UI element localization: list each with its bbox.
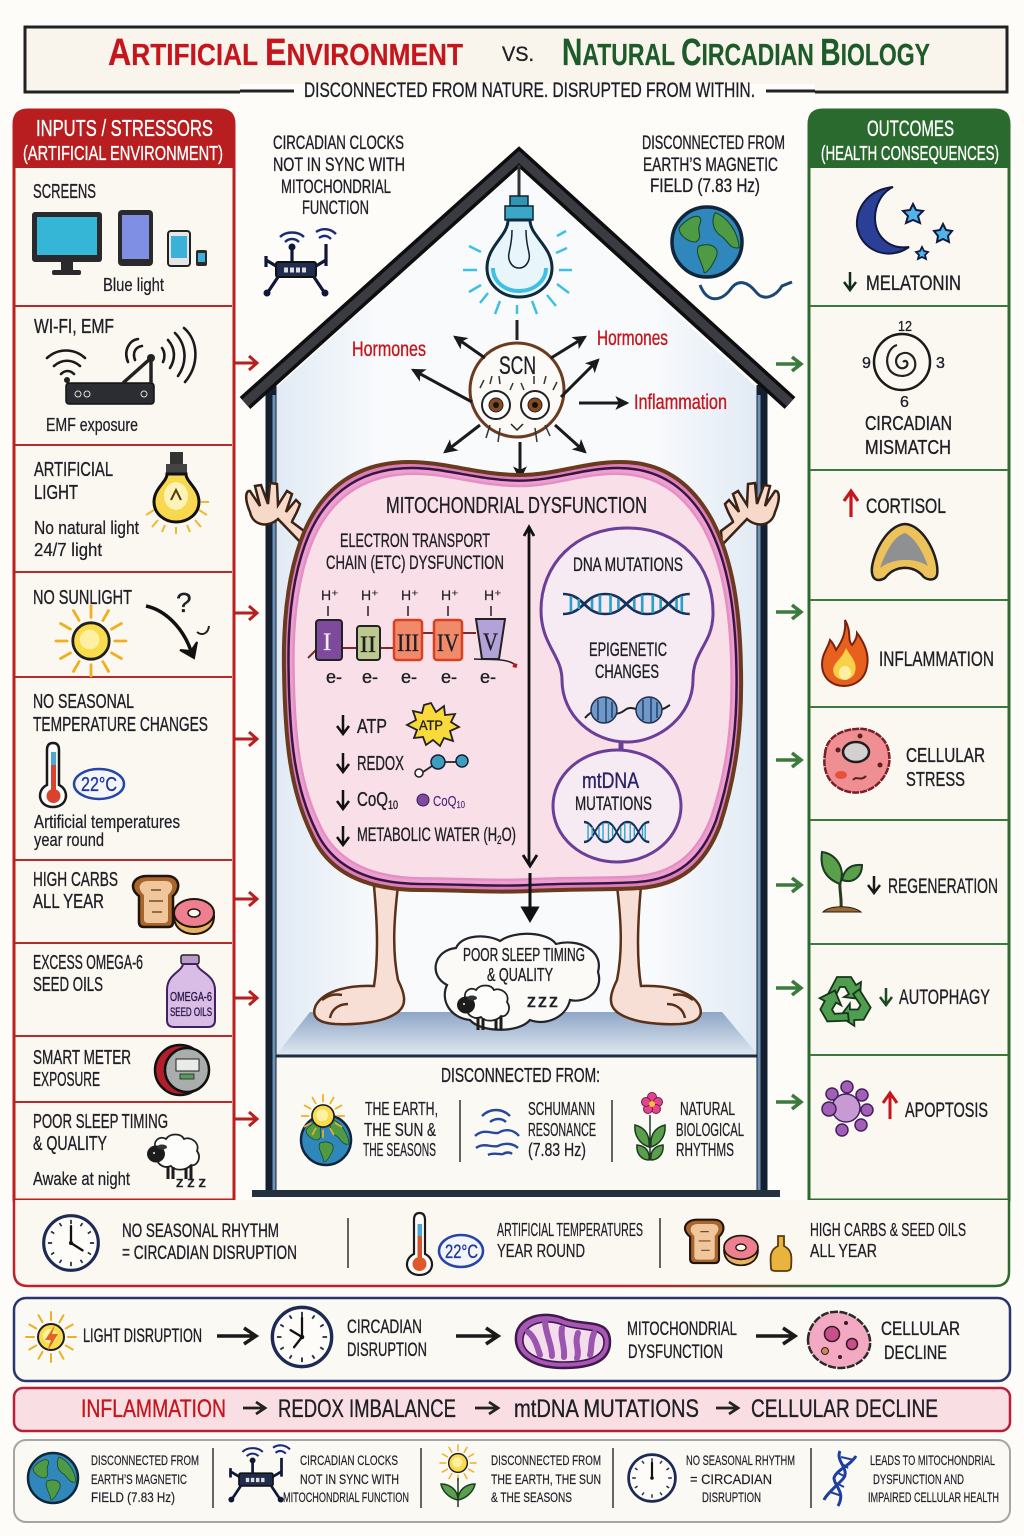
panel: causal chain: LIGHT DISRUPTION — [83, 1326, 202, 1347]
inputs header: INPUTS / STRESSORS — [36, 115, 213, 141]
deficit list: METABOLIC WATER (H — [357, 825, 562, 846]
outcome: circadian mismatch: CIRCADIAN — [865, 413, 952, 435]
icon: moon and stars — [857, 187, 952, 259]
panel: key takeaways: FIELD (7.83 Hz) — [91, 1489, 175, 1505]
row: high carbs all year: ALL YEAR — [33, 891, 104, 913]
down arrow — [868, 876, 880, 893]
arrow — [756, 1328, 795, 1344]
badge: 22 degrees: 22°C — [81, 774, 117, 796]
deficit list: O) — [502, 825, 516, 846]
row: wi-fi, emf — [34, 316, 195, 435]
electron transport chain diagram: H⁺ — [484, 587, 502, 603]
panel: disruption summary: ALL YEAR — [810, 1241, 877, 1261]
badge: 22 degrees — [439, 1235, 483, 1267]
icon: flame — [822, 620, 868, 686]
outcomes header: OUTCOMES — [867, 116, 954, 141]
title: natural circadian biology: NATURAL CIRCADIAN BIOLOGY — [562, 32, 930, 74]
arrows: house to outcomes — [776, 357, 801, 1109]
house structure — [245, 157, 790, 1197]
note: circadian clocks: FUNCTION — [302, 198, 369, 219]
panel: key takeaways: DYSFUNCTION AND — [873, 1471, 964, 1487]
banner: decline chain — [14, 1388, 1010, 1431]
SCN label: SCN — [499, 352, 536, 380]
panel: key takeaways: THE EARTH, THE SUN — [491, 1471, 601, 1487]
label: hormones left: Hormones — [352, 338, 426, 361]
heading: MITOCHONDRIAL DYSFUNCTION — [386, 492, 647, 518]
icon: spiral clock: 6 — [900, 394, 909, 411]
deficit list: 2 — [497, 833, 502, 847]
item: natural biological rhythms: BIOLOGICAL — [676, 1120, 744, 1140]
nuclear bubble: DNA MUTATIONS — [573, 555, 683, 576]
panel: disruption summary: ARTIFICIAL TEMPERATURES — [497, 1220, 643, 1240]
deficit list: CoQ — [357, 789, 398, 811]
row: no sunlight — [33, 587, 209, 676]
electron transport chain diagram: e- — [441, 667, 457, 687]
icon: oil bottle: OMEGA-6 — [170, 989, 212, 1004]
note: circadian clocks: CIRCADIAN CLOCKS — [273, 133, 404, 154]
row: no seasonal temperature changes — [33, 691, 208, 850]
row: excess omega-6 seed oils: EXCESS OMEGA-6 — [33, 952, 143, 974]
panel: causal chain — [14, 1298, 1010, 1381]
icon: smart meter — [155, 1045, 209, 1095]
nuclear bubble — [541, 528, 713, 742]
badge: 22 degrees: 22°C — [445, 1242, 478, 1263]
item: earth sun seasons: THE EARTH, — [365, 1099, 438, 1119]
arms and hands — [246, 483, 779, 545]
outcome: inflammation — [822, 620, 994, 686]
panel: key takeaways: DISCONNECTED FROM — [491, 1452, 601, 1468]
outcome: circadian mismatch: MISMATCH — [865, 437, 951, 459]
note: circadian clocks: MITOCHONDRIAL — [281, 177, 391, 198]
row: artificial light — [34, 452, 209, 560]
panel: mitochondrial dysfunction — [284, 462, 741, 892]
row: wi-fi, emf: EMF exposure — [46, 415, 138, 435]
icon: dna helix — [563, 594, 690, 614]
row: high carbs all year — [33, 869, 214, 934]
icon: recycle — [815, 977, 876, 1030]
zzz: zzz — [176, 1174, 206, 1191]
title: artificial environment: ARTIFICIAL ENVIRONMENT — [108, 32, 463, 74]
panel: causal chain: CIRCADIAN — [347, 1317, 422, 1338]
icon: clock — [272, 1307, 332, 1367]
electron transport chain diagram: e- — [326, 667, 342, 687]
etc heading: CHAIN (ETC) DYSFUNCTION — [326, 553, 504, 574]
etc heading — [326, 531, 504, 574]
legs — [314, 886, 701, 1024]
inputs header: (ARTIFICIAL ENVIRONMENT) — [23, 143, 223, 165]
panel: causal chain: DISRUPTION — [347, 1340, 427, 1361]
outcome: melatonin — [844, 187, 961, 295]
electron transport chain diagram: I — [323, 629, 331, 656]
title banner — [25, 27, 1007, 102]
banner: decline chain: INFLAMMATION — [81, 1395, 226, 1423]
mtDNA bubble: mtDNA — [582, 768, 639, 793]
panel: causal chain: MITOCHONDRIAL — [627, 1319, 737, 1340]
cloud: poor sleep timing: POOR SLEEP TIMING — [463, 945, 585, 965]
panel: disruption summary: NO SEASONAL RHYTHM — [122, 1221, 279, 1242]
icon: atp burst — [407, 703, 459, 746]
panel: key takeaways: MITOCHONDRIAL FUNCTION — [283, 1489, 409, 1505]
icon: sun — [56, 606, 126, 676]
row: smart meter exposure — [33, 1045, 209, 1095]
panel: causal chain: DYSFUNCTION — [628, 1342, 723, 1363]
icon: sun with lightning — [26, 1312, 76, 1362]
cloud: poor sleep timing — [436, 934, 599, 1030]
outcome: autophagy — [815, 977, 990, 1030]
icon: sheep — [147, 1134, 199, 1179]
icon: bread, donut, oil — [685, 1220, 791, 1271]
panel: disruption summary: = CIRCADIAN DISRUPTION — [122, 1243, 297, 1264]
outcome: cellular stress — [824, 729, 985, 793]
electron transport chain diagram: H⁺ — [401, 587, 418, 603]
outcomes header — [809, 110, 1009, 168]
icon: oil bottle — [167, 955, 215, 1027]
banner: decline chain: CELLULAR DECLINE — [751, 1395, 938, 1423]
label: inflammation: Inflammation — [634, 391, 727, 414]
arrow — [217, 1328, 256, 1344]
icon: clock — [44, 1216, 98, 1270]
zzz: zzz — [527, 991, 558, 1011]
row: poor sleep timing: POOR SLEEP TIMING — [33, 1111, 168, 1133]
note: disconnected from magnetic field — [642, 133, 785, 197]
panel: key takeaways: = CIRCADIAN — [690, 1471, 772, 1487]
panel: causal chain: CELLULAR — [881, 1319, 960, 1340]
icon: router — [47, 328, 195, 404]
panel: disruption summary — [14, 1200, 1009, 1286]
electron transport chain diagram: II — [360, 632, 376, 657]
row: excess omega-6 seed oils: SEED OILS — [33, 974, 103, 996]
SCN clock with arrows — [413, 320, 627, 478]
item: natural biological rhythms: NATURAL — [680, 1099, 735, 1119]
panel: disconnected from: DISCONNECTED FROM: — [441, 1065, 600, 1087]
icon: screens — [32, 210, 207, 275]
item: schumann resonance — [475, 1099, 596, 1160]
electron transport chain diagram: IV — [437, 630, 459, 657]
label: hormones right: Hormones — [597, 327, 668, 350]
row: excess omega-6 seed oils — [33, 952, 215, 1027]
row: smart meter exposure: SMART METER — [33, 1047, 131, 1069]
down arrow — [880, 988, 892, 1005]
row: poor sleep timing — [33, 1111, 206, 1191]
icon: sheep — [457, 986, 509, 1030]
radiating arrows — [413, 337, 627, 478]
icon: spiral clock — [862, 318, 945, 411]
arrows: inputs into house — [234, 356, 257, 1126]
panel: disruption summary: YEAR ROUND — [497, 1241, 585, 1261]
icon: falling arrow with question mark: ? — [176, 587, 192, 618]
panel: disconnected from — [301, 1065, 744, 1165]
banner: decline chain: mtDNA MUTATIONS — [514, 1395, 699, 1423]
nuclear bubble: EPIGENETIC — [589, 640, 667, 661]
icon: coq10: 10 — [457, 800, 465, 811]
panel: key takeaways: DISRUPTION — [702, 1489, 761, 1505]
icon: apoptotic cells — [822, 1081, 873, 1136]
icon: thermometer — [407, 1213, 432, 1275]
icon: coq10 — [417, 793, 465, 811]
deficit list: ATP — [357, 716, 387, 738]
panel: causal chain: DECLINE — [884, 1343, 947, 1364]
note: disconnected from magnetic field: EARTH’S MAGNETIC — [643, 155, 778, 176]
etc heading: ELECTRON TRANSPORT — [340, 531, 490, 552]
icon: atp burst: ATP — [419, 717, 443, 733]
icon: thermometer — [40, 743, 66, 807]
SCN circle — [470, 343, 564, 437]
icon: chromatin — [585, 697, 670, 723]
icon: router drone — [228, 1445, 290, 1503]
panel: key takeaways — [14, 1440, 1010, 1522]
row: no seasonal temperature changes: NO SEASONAL — [33, 691, 134, 713]
panel: outcomes — [809, 110, 1009, 1200]
deficit list: REDOX — [357, 753, 404, 775]
icon: bread and donut — [133, 876, 214, 934]
item: schumann resonance: (7.83 Hz) — [528, 1140, 586, 1160]
item: natural biological rhythms: RHYTHMS — [676, 1140, 734, 1160]
outcome: cellular stress: STRESS — [906, 769, 965, 791]
panel: key takeaways: & THE SEASONS — [491, 1489, 572, 1505]
item: earth sun seasons — [301, 1095, 438, 1165]
electron transport chain diagram: e- — [401, 667, 417, 687]
row: poor sleep timing: Awake at night — [33, 1169, 130, 1189]
row: smart meter exposure: EXPOSURE — [33, 1069, 100, 1091]
icon: seedling — [822, 852, 862, 912]
outcome: regeneration — [822, 852, 998, 912]
icon: clock — [629, 1455, 675, 1501]
outcome: apoptosis: APOPTOSIS — [905, 1099, 988, 1122]
electron transport chain diagram: H⁺ — [441, 587, 458, 603]
electron transport chain diagram: V — [483, 629, 498, 656]
icon: oil bottle: SEED OILS — [170, 1005, 212, 1019]
icon: yellow bulb — [146, 452, 209, 534]
icon: router drone — [264, 229, 336, 296]
icon: molecule — [415, 755, 468, 777]
nuclear bubble: CHANGES — [595, 662, 659, 683]
row: no seasonal temperature changes: year round — [34, 830, 104, 850]
note: disconnected from magnetic field: DISCONNECTED FROM — [642, 133, 785, 154]
banner: decline chain: REDOX IMBALANCE — [278, 1395, 456, 1423]
electron transport chain diagram: e- — [480, 667, 496, 687]
row: screens: Blue light — [103, 275, 164, 295]
icon: mitochondrial dna — [584, 822, 649, 842]
panel: key takeaways: NOT IN SYNC WITH — [300, 1471, 399, 1487]
row: no seasonal temperature changes: Artificial temperatures — [34, 812, 180, 832]
electron transport chain diagram: H⁺ — [321, 587, 338, 603]
electron transport chain diagram — [308, 587, 517, 687]
outcome: melatonin: MELATONIN — [866, 272, 961, 295]
note: circadian clocks: NOT IN SYNC WITH — [273, 155, 405, 176]
item: earth sun seasons: THE SUN & — [364, 1120, 436, 1140]
panel: inputs / stressors — [14, 110, 234, 1200]
item: schumann resonance: RESONANCE — [528, 1120, 596, 1140]
up arrow — [844, 491, 858, 517]
row: artificial light: LIGHT — [34, 482, 78, 504]
electron transport chain diagram: H⁺ — [361, 587, 378, 603]
arrows — [243, 1402, 738, 1414]
row: wi-fi, emf: WI-FI, EMF — [34, 316, 114, 338]
icon: earth — [672, 207, 742, 277]
row: no sunlight: NO SUNLIGHT — [33, 587, 132, 609]
icon: spiral clock: 12 — [898, 318, 912, 335]
arrow: down to sleep — [523, 873, 537, 920]
row: screens — [32, 181, 207, 295]
outcome: cellular stress: CELLULAR — [906, 745, 985, 767]
eyes — [480, 376, 557, 442]
row: artificial light: 24/7 light — [34, 540, 102, 560]
mtDNA bubble — [553, 742, 681, 862]
item: natural biological rhythms — [635, 1092, 744, 1160]
electron transport chain diagram: e- — [362, 667, 378, 687]
icon: sun flower — [440, 1445, 476, 1507]
note: circadian clocks — [273, 133, 405, 219]
icon: adrenal gland — [872, 524, 937, 580]
row: poor sleep timing: & QUALITY — [33, 1133, 107, 1155]
icon: mitochondrion — [516, 1315, 610, 1368]
panel: key takeaways: NO SEASONAL RHYTHM — [686, 1452, 795, 1468]
roof — [245, 157, 790, 403]
outcome: cortisol — [844, 491, 946, 580]
icon: falling arrow with question mark — [146, 587, 209, 658]
icon: blue light bulb — [463, 165, 572, 314]
outcome: cortisol: CORTISOL — [866, 495, 946, 518]
panel: key takeaways: CIRCADIAN CLOCKS — [300, 1452, 398, 1468]
arrow — [456, 1328, 498, 1344]
subtitle: DISCONNECTED FROM NATURE. DISRUPTED FROM WITHIN. — [304, 79, 755, 102]
up arrow — [883, 1093, 897, 1119]
mitochondrion body — [284, 462, 741, 892]
icon: schumann wave — [700, 282, 792, 299]
divider double arrow — [523, 527, 537, 866]
icon: stressed cell — [824, 729, 889, 793]
icon: dna strand — [824, 1451, 856, 1506]
cloud: poor sleep timing: & QUALITY — [487, 965, 553, 985]
row: screens: SCREENS — [33, 181, 96, 203]
outcome: apoptosis — [822, 1081, 988, 1136]
icon: spiral clock: 3 — [936, 355, 945, 372]
row: artificial light: No natural light — [34, 518, 139, 538]
icon: cell — [808, 1312, 870, 1368]
badge: 22 degrees — [74, 769, 124, 799]
outcome: circadian mismatch — [862, 318, 952, 459]
icon: spiral clock: 9 — [862, 355, 871, 372]
title: versus: VS. — [502, 43, 534, 66]
down arrow — [844, 272, 856, 290]
row: high carbs all year: HIGH CARBS — [33, 869, 118, 891]
inputs header — [14, 110, 234, 168]
mtDNA bubble: MUTATIONS — [575, 794, 652, 815]
panel: key takeaways: EARTH’S MAGNETIC — [91, 1471, 187, 1487]
item: schumann resonance: SCHUMANN — [528, 1099, 595, 1119]
note: disconnected from magnetic field: FIELD (7.83 Hz) — [650, 176, 760, 197]
row: no seasonal temperature changes: TEMPERATURE CHANGES — [33, 714, 208, 736]
electron transport chain diagram: III — [397, 630, 419, 657]
deficit list — [337, 703, 516, 847]
item: earth sun seasons: THE SEASONS — [363, 1140, 436, 1160]
panel: key takeaways: DISCONNECTED FROM — [91, 1452, 199, 1468]
icon: earth — [28, 1453, 78, 1503]
icon: coq10: CoQ — [433, 793, 464, 810]
row: artificial light: ARTIFICIAL — [34, 459, 113, 481]
deficit list: 10 — [388, 798, 398, 812]
